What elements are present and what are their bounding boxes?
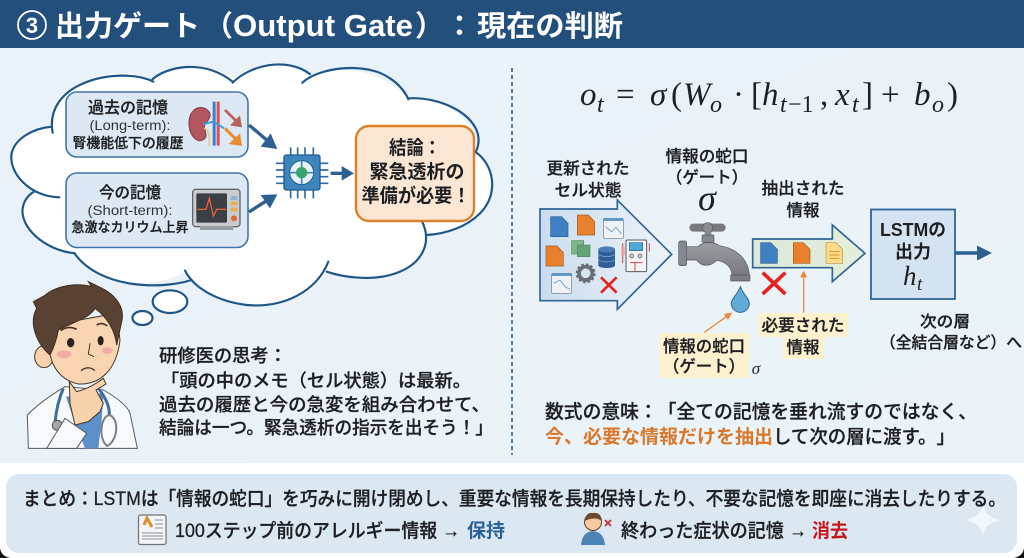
title: （ bbox=[204, 11, 233, 43]
text: resident's thought: 結論は一つ。緊急透析の指示を出そう！」 bbox=[159, 418, 493, 438]
formula: o bbox=[710, 92, 722, 118]
callout: needed information bbox=[758, 313, 848, 359]
text: resident's thought: 研修医の思考： bbox=[159, 346, 287, 366]
label: next layer bbox=[880, 313, 1022, 352]
text: formula meaning: して次の層に渡す。」 bbox=[773, 426, 955, 448]
formula: t bbox=[780, 92, 788, 118]
illustration: doctor bbox=[27, 282, 137, 448]
text: current memory bbox=[72, 184, 188, 235]
text: resident's thought: 過去の履歴と今の急変を組み合わせて、 bbox=[159, 395, 490, 415]
label: extracted information: 抽出された bbox=[762, 179, 844, 198]
icon: faucet bbox=[679, 223, 750, 312]
icon: chart bbox=[552, 273, 572, 293]
icon: orange document bbox=[577, 215, 595, 235]
label: next layer: 次の層 bbox=[920, 313, 970, 331]
cloud shape bbox=[11, 64, 492, 306]
text: formula meaning: 今、必要な情報だけを抽出 bbox=[545, 426, 773, 448]
formula: [ bbox=[751, 77, 762, 113]
formula: σ bbox=[650, 77, 668, 113]
icon: dialysis machine bbox=[621, 240, 649, 272]
panel: LSTM output: LSTMの bbox=[880, 220, 946, 240]
text: conclusion: 結論： bbox=[389, 137, 441, 159]
formula: h bbox=[762, 77, 778, 113]
title: ） bbox=[415, 11, 444, 43]
text: keep: 保持 bbox=[467, 520, 505, 542]
icon: yellow document bbox=[826, 243, 843, 263]
icon: allergy document bbox=[138, 515, 166, 544]
header bar bbox=[0, 0, 1024, 48]
arrow: LSTM output bbox=[955, 246, 992, 260]
formula: t bbox=[852, 92, 860, 118]
arrow: pointer to drop bbox=[704, 312, 732, 332]
text: erase: 終わった症状の記憶 → bbox=[621, 520, 807, 542]
divider bbox=[511, 68, 513, 455]
callout: needed information: 情報 bbox=[786, 338, 820, 357]
text: past memory bbox=[72, 99, 184, 151]
arrow: current to chip bbox=[249, 194, 277, 212]
panel: LSTM output: h bbox=[903, 261, 916, 291]
label: updated cell state bbox=[546, 159, 630, 200]
panel: LSTM output: t bbox=[917, 274, 923, 295]
icon: blue document bbox=[761, 243, 777, 263]
text: current memory: (Short-term): bbox=[88, 203, 172, 218]
text: keep: 100ステップ前のアレルギー情報 → bbox=[175, 520, 460, 542]
formula: −1 bbox=[788, 92, 814, 118]
icon: monitor bbox=[193, 189, 240, 230]
label: next layer: （全結合層など）へ bbox=[880, 334, 1022, 352]
text: formula meaning: 数式の意味：「全ての記憶を垂れ流すのではなく、 bbox=[545, 401, 977, 423]
text: conclusion bbox=[362, 137, 470, 207]
icon: orange document bbox=[793, 243, 810, 263]
formula: + bbox=[881, 77, 900, 113]
text: current memory: 急激なカリウム上昇 bbox=[72, 219, 188, 235]
icon: orange document bbox=[546, 246, 563, 266]
label: extracted information bbox=[762, 179, 844, 220]
title bbox=[18, 8, 623, 43]
formula: t bbox=[597, 92, 605, 118]
formula: W bbox=[683, 77, 713, 113]
text: current memory: 今の記憶 bbox=[99, 184, 161, 202]
title: Output Gate bbox=[233, 8, 413, 43]
callout: information tap: 情報の蛇口 bbox=[663, 337, 745, 356]
label: information tap bbox=[666, 147, 748, 218]
panel: current memory bbox=[66, 173, 248, 248]
label: information tap: σ bbox=[698, 178, 717, 218]
formula: ] bbox=[862, 77, 873, 113]
label: updated cell state: セル状態 bbox=[554, 181, 622, 200]
title: 出力ゲート bbox=[55, 10, 200, 43]
formula: = bbox=[616, 77, 635, 113]
icon: water drop bbox=[731, 287, 749, 312]
arrow: pointer to needed information bbox=[800, 271, 807, 313]
formula: x bbox=[834, 77, 850, 113]
title: 3 bbox=[26, 13, 38, 38]
formula: · bbox=[733, 77, 744, 113]
panel: LSTM output bbox=[871, 210, 955, 299]
panel: past memory bbox=[66, 92, 248, 157]
title: 現在の判断 bbox=[477, 10, 623, 43]
panel: LSTM output: 出力 bbox=[895, 242, 931, 262]
arrow: cell state bbox=[540, 200, 672, 309]
thought bubble large bbox=[153, 290, 187, 313]
text: past memory: (Long-term): bbox=[90, 118, 170, 133]
callout: needed information: 必要された bbox=[762, 316, 844, 335]
text: formula meaning bbox=[545, 401, 977, 448]
formula: ( bbox=[671, 77, 682, 113]
text: past memory: 過去の記憶 bbox=[88, 99, 168, 117]
formula: ) bbox=[947, 77, 958, 113]
icon: green sheets bbox=[572, 241, 590, 257]
formula: , bbox=[820, 77, 828, 113]
panel: thought cloud bbox=[11, 64, 492, 313]
title: ： bbox=[445, 11, 474, 43]
icon: gear bbox=[577, 264, 595, 282]
icon: database bbox=[598, 246, 615, 268]
formula bbox=[580, 77, 958, 118]
icon: kidney bbox=[189, 102, 242, 146]
text: resident's thought: 「頭の中のメモ（セル状態）は最新。 bbox=[161, 371, 471, 391]
label: extracted information: 情報 bbox=[786, 201, 820, 220]
text: conclusion: 準備が必要！ bbox=[362, 184, 470, 207]
label: information tap: （ゲート） bbox=[666, 168, 748, 187]
formula: o bbox=[932, 92, 944, 118]
icon: chip bbox=[276, 147, 328, 198]
label: information tap: 情報の蛇口 bbox=[666, 147, 748, 166]
formula: b bbox=[914, 77, 930, 113]
text: resident's thought bbox=[159, 346, 493, 438]
icon: red cross bbox=[601, 277, 617, 293]
icon: person with cross bbox=[581, 513, 611, 545]
arrow: extracted information bbox=[753, 225, 865, 282]
icon: blue document bbox=[551, 217, 568, 237]
arrow: past to chip bbox=[249, 125, 277, 149]
panel: conclusion bbox=[356, 126, 474, 221]
formula: o bbox=[580, 77, 596, 113]
panel: summary bbox=[6, 474, 1017, 553]
callout: information tap bbox=[659, 333, 761, 378]
icon: chart bbox=[603, 218, 623, 238]
bottom corners bbox=[0, 548, 1024, 558]
text: erase: 消去 bbox=[812, 520, 848, 542]
icon: large red cross bbox=[763, 273, 785, 294]
thought bubble small bbox=[132, 311, 152, 325]
text: conclusion: 緊急透析の bbox=[370, 160, 464, 183]
text: past memory: 腎機能低下の履歴 bbox=[72, 135, 184, 151]
arrow: chip to conclusion bbox=[331, 166, 354, 181]
callout: information tap: σ bbox=[752, 359, 761, 378]
label: updated cell state: 更新された bbox=[546, 159, 630, 178]
sparkle bbox=[965, 505, 1001, 535]
callout: information tap: （ゲート） bbox=[663, 357, 745, 376]
